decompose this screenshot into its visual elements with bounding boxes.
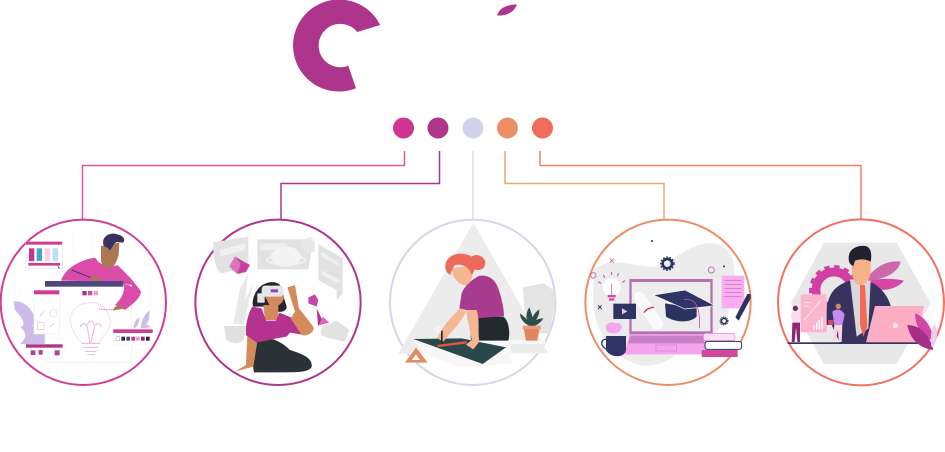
- window: [45, 285, 132, 362]
- laptop base: [624, 334, 708, 354]
- small gear: [721, 318, 727, 324]
- bulb: [70, 303, 110, 355]
- leaf plants: [13, 301, 150, 344]
- man forearm: [115, 285, 141, 310]
- chart board: [801, 294, 827, 332]
- window swatches: [82, 291, 87, 295]
- gray triangle: [398, 223, 548, 353]
- leaves: [867, 261, 901, 281]
- speech cloud: [606, 322, 622, 333]
- panel: VR illustration: [195, 220, 361, 385]
- palette panel: [113, 329, 153, 345]
- gray hexagon: [791, 243, 931, 364]
- panel: designer illustration: [1, 220, 166, 385]
- drafting table: [413, 338, 506, 364]
- man suit: [826, 281, 892, 343]
- faint grid: [19, 233, 151, 307]
- base line: [788, 342, 918, 344]
- gray floating panels: [213, 237, 343, 300]
- video card: [613, 304, 636, 319]
- panel: business illustration: [778, 219, 944, 385]
- panel: drafter illustration: [390, 220, 556, 385]
- diploma: [635, 292, 663, 329]
- shirt: [850, 279, 871, 337]
- plant: [233, 273, 253, 325]
- head: [852, 258, 871, 285]
- plant: [520, 307, 543, 341]
- woman support arm: [235, 335, 257, 372]
- accents: [591, 240, 725, 309]
- books: [703, 333, 735, 341]
- woman neck: [263, 305, 278, 320]
- document: [722, 276, 744, 308]
- pen: [735, 294, 751, 321]
- shapes panel: [26, 344, 63, 358]
- mug: [602, 336, 626, 356]
- standing figure: [828, 304, 845, 342]
- orange triangle: [405, 348, 428, 363]
- graduation cap: [665, 303, 697, 321]
- bulb: [598, 272, 625, 301]
- presenter: [791, 306, 801, 342]
- gray sheets: [523, 283, 556, 333]
- woman legs: [253, 338, 312, 372]
- woman hair: [253, 282, 287, 312]
- laptop: [866, 306, 924, 342]
- face and headset: [265, 295, 284, 307]
- gear: [816, 272, 852, 308]
- color card: [26, 242, 63, 268]
- woman raised arm: [287, 285, 314, 335]
- gear top: [663, 259, 672, 268]
- gray cubes: [302, 237, 315, 253]
- purple cube: [229, 257, 250, 274]
- hands: [91, 276, 124, 311]
- palette dots: [393, 118, 553, 138]
- logo mark: [293, 0, 517, 92]
- laptop screen: [629, 279, 713, 334]
- man head: [101, 243, 119, 269]
- gray blob: [593, 243, 734, 366]
- foreground leaves: [915, 313, 934, 341]
- tool panel: [34, 290, 59, 334]
- woman: [433, 254, 509, 349]
- connector lines: [82, 151, 861, 219]
- woman top: [246, 307, 304, 343]
- planet: [271, 247, 301, 267]
- man sweater body: [61, 258, 141, 300]
- panel: education illustration: [585, 220, 751, 385]
- tie: [860, 285, 867, 337]
- flower: [308, 294, 318, 307]
